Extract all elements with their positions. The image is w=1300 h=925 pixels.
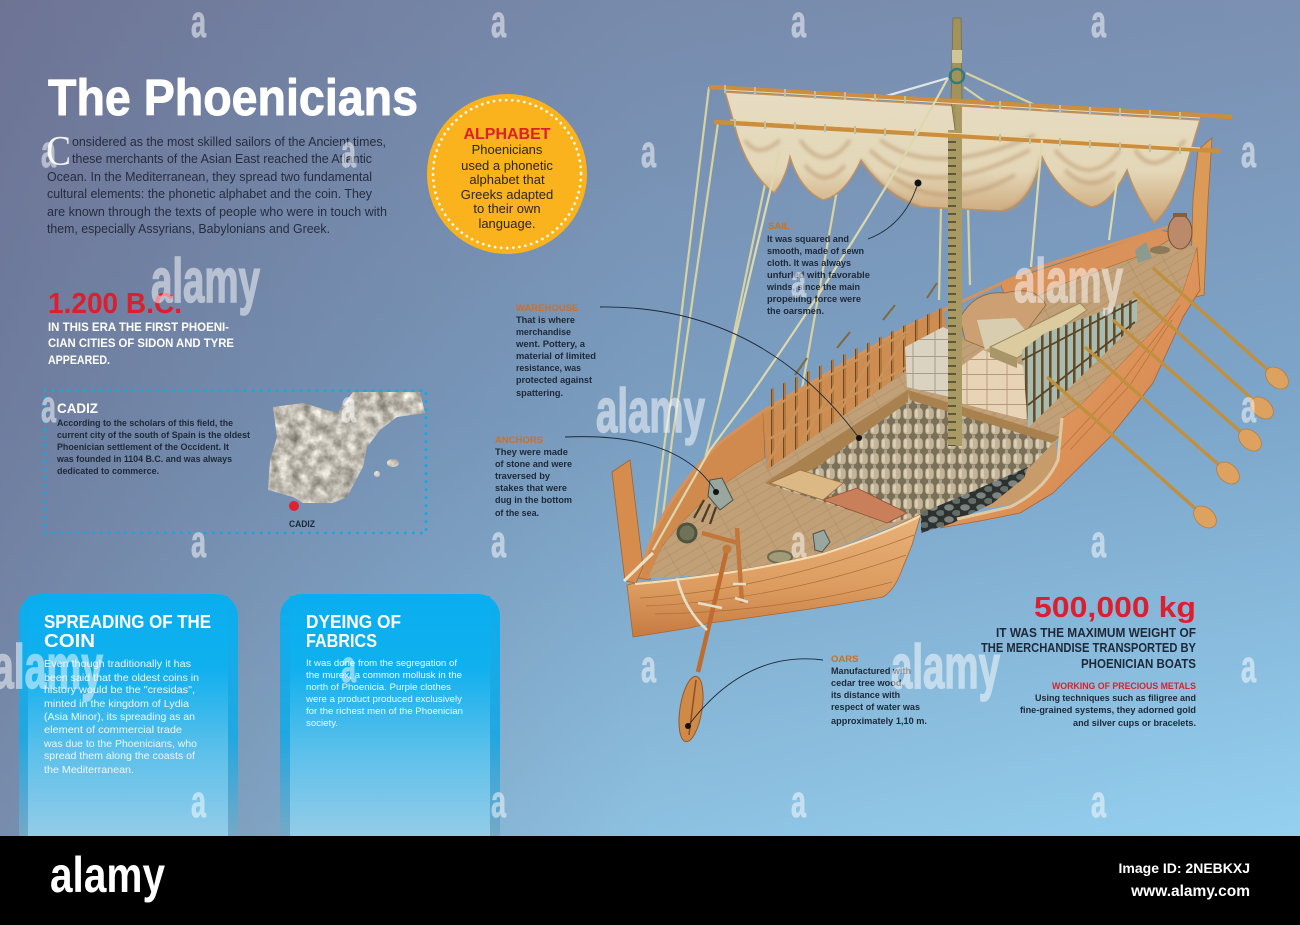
precious metals text: fine-grained systems, they adorned gold [1020, 705, 1196, 716]
Cadiz text: CADIZ [57, 400, 98, 416]
oars label: respect of water was [831, 702, 920, 713]
stock watermarks: a [191, 516, 207, 567]
intro text block: these merchants of the Asian East reached the Atlantic [72, 151, 372, 166]
dyeing body text [305, 658, 463, 729]
coin body text: been said that the oldest coins in [44, 672, 199, 684]
weight fact: 500,000 kg: IT WAS THE MAXIMUM WEIGHT OF [996, 626, 1196, 640]
panel: dyeing of fabrics [280, 594, 500, 854]
stock watermarks: a [41, 381, 57, 432]
mast [948, 18, 964, 446]
stock watermarks: a [341, 381, 357, 432]
coin body text: Even though traditionally it has [44, 658, 191, 670]
stock watermarks: a [1091, 776, 1107, 827]
stock watermarks: alamy [891, 633, 1000, 702]
date fact: 1.200 B.C.: APPEARED. [48, 353, 110, 367]
callout: alphabet circle: alphabet that [469, 172, 545, 187]
cargo bales [905, 291, 1087, 420]
panel: spreading of the coin [19, 594, 238, 854]
stock watermarks: a [491, 516, 507, 567]
coin body text: element of commercial trade [44, 724, 182, 736]
stock watermarks: a [641, 126, 657, 177]
far bulwark at the stern [1000, 230, 1178, 310]
panel: dyeing of fabrics: FABRICS [306, 631, 377, 651]
hull plank lines [1060, 305, 1180, 450]
stock watermarks: a [791, 256, 807, 307]
oars label [831, 654, 927, 727]
stock watermarks: a [1241, 381, 1257, 432]
footer bar: alamy [50, 847, 165, 903]
hull rim at the cut [957, 418, 1062, 519]
coin body text: the Mediterranean. [44, 764, 134, 776]
inner hull tan side [970, 442, 1057, 510]
stock watermarks: alamy [151, 247, 260, 316]
intro text block: C [46, 129, 71, 175]
right fence [1022, 298, 1137, 428]
oars leader line [685, 659, 823, 729]
callout: alphabet circle: Greeks adapted [461, 187, 553, 202]
left fence [763, 283, 950, 470]
sail leader line [868, 180, 922, 239]
intro text block: Ocean. In the Mediterranean, they spread two fundamental [47, 169, 372, 184]
sail label: propelling force were [767, 294, 861, 305]
ship illustration [612, 18, 1293, 743]
anchors label: of stone and were [495, 459, 572, 470]
ropes in front of the sail [653, 78, 1118, 550]
warehouse label: WAREHOUSE [516, 303, 578, 314]
stock watermarks: a [341, 641, 357, 692]
Cadiz text: current city of the south of Spain is the oldest [57, 430, 251, 441]
wooden boards [770, 470, 843, 500]
warehouse label: material of limited [516, 351, 596, 362]
callout: alphabet circle: ALPHABET [463, 126, 551, 143]
stock watermarks: a [1241, 641, 1257, 692]
coin body text: (Asia Minor), its spreading as an [44, 711, 195, 723]
panel: dyeing of fabrics: DYEING OF [306, 612, 401, 632]
weight fact: 500,000 kg [981, 592, 1197, 671]
weight fact: 500,000 kg: 500,000 kg [1034, 592, 1196, 624]
stock watermarks: a [1091, 516, 1107, 567]
Cadiz text: dedicated to commerce. [57, 466, 159, 477]
near hull [624, 514, 921, 637]
Cadiz text: was founded in 1104 B.C. and was always [56, 454, 232, 465]
yards [709, 85, 1232, 154]
sail label: It was squared and [767, 234, 849, 245]
intro text block [46, 129, 387, 236]
sail label: unfurled with favorable [767, 270, 870, 281]
callout: alphabet circle: to their own [473, 201, 541, 216]
anchors label: traversed by [495, 471, 551, 482]
stock watermarks: a [191, 776, 207, 827]
far gunwale [640, 227, 1168, 576]
sail [725, 92, 1200, 223]
anchors label [495, 435, 572, 519]
dyeing body text: the murex, a common mollusk in the [306, 670, 462, 681]
panel: Cadiz [45, 390, 426, 533]
red bricks [823, 488, 907, 523]
intro text block: are known through the texts of people who were in touch with [47, 204, 387, 219]
hold with jars [770, 398, 1058, 523]
callout: alphabet circle: used a phonetic [461, 158, 553, 173]
stock watermarks: a [641, 641, 657, 692]
map of Iberia [268, 392, 425, 530]
dyeing body text: north of Phoenicia. Purple clothes [306, 682, 451, 693]
title: The Phoenicians [48, 69, 418, 126]
panel: spreading of the coin: COIN [44, 631, 95, 651]
dyeing body text: were a product produced exclusively [305, 694, 462, 705]
callout: alphabet circle: Phoenicians [472, 142, 543, 157]
weight fact: 500,000 kg: THE MERCHANDISE TRANSPORTED BY [981, 641, 1197, 655]
oars label: Manufactured with [831, 666, 911, 677]
date fact: 1.200 B.C. [48, 288, 234, 367]
precious metals text: and silver cups or bracelets. [1073, 718, 1196, 729]
coin body text: minted in the kingdom of Lydia [44, 698, 189, 710]
intro text block: them, especially Assyrians, Babylonians and Greek. [47, 221, 330, 236]
oars label: OARS [831, 654, 858, 665]
map of Iberia: CADIZ [289, 519, 315, 530]
stock watermarks: a [491, 776, 507, 827]
weight fact: 500,000 kg: PHOENICIAN BOATS [1081, 657, 1196, 671]
coin body text [43, 658, 199, 776]
hold beams [765, 390, 1060, 487]
dyeing body text: for the richest men of the Phoenician [306, 706, 463, 717]
callout: alphabet circle: language. [478, 216, 536, 231]
stock watermarks: a [791, 776, 807, 827]
anchors label: of the sea. [495, 508, 539, 519]
date fact: 1.200 B.C.: IN THIS ERA THE FIRST PHOENI- [48, 320, 229, 334]
precious metals text [1020, 681, 1196, 729]
deck [648, 238, 1197, 578]
panel: spreading of the coin: SPREADING OF THE [44, 612, 211, 632]
warehouse label: protected against [516, 375, 593, 386]
footer bar: Image ID: 2NEBKXJ [1119, 860, 1250, 876]
anchors label: stakes that were [495, 483, 567, 494]
bow post [612, 460, 643, 583]
sail label: winds, since the main [766, 282, 860, 293]
sail label: smooth, made of sewn [767, 246, 864, 257]
footer bar: www.alamy.com [1130, 883, 1250, 900]
warehouse label [515, 303, 596, 399]
stock watermarks: a [1241, 126, 1257, 177]
sail label: cloth. It was always [767, 258, 851, 269]
warehouse label: That is where [516, 315, 575, 326]
ballast stones [921, 467, 1028, 533]
sail label: the oarsmen. [767, 306, 824, 317]
footer bar [0, 836, 1300, 925]
anchors label: dug in the bottom [495, 495, 572, 506]
stock watermarks: alamy [1014, 247, 1123, 316]
warehouse label: went. Pottery, a [515, 339, 586, 350]
intro text block: cultural elements: the phonetic alphabet and the coin. They [47, 186, 372, 201]
stern post [1190, 138, 1212, 298]
coin body text: was due to the Phoenicians, who [43, 738, 197, 750]
stock watermarks: a [41, 126, 57, 177]
far bulwark at the bow [638, 411, 765, 580]
ropes behind the sail [652, 73, 1095, 545]
oars label: its distance with [831, 690, 900, 701]
oars label: cedar tree wood, [831, 678, 904, 689]
sail label [766, 221, 870, 317]
coin body text: history would be the "cresidas", [44, 684, 195, 696]
Cadiz text: According to the scholars of this field, the [57, 418, 233, 429]
oars label: approximately 1,10 m. [831, 716, 927, 727]
precious metals text: Using techniques such as filigree and [1035, 693, 1196, 704]
intro text block: onsidered as the most skilled sailors of the Ancient times, [72, 134, 386, 149]
coin body text: spread them along the coasts of [44, 750, 195, 762]
oars on the far side [1047, 268, 1293, 532]
Cadiz text [56, 400, 251, 477]
precious metals text: WORKING OF PRECIOUS METALS [1052, 681, 1196, 692]
stock watermarks: a [341, 126, 357, 177]
Cadiz text: Phoenician settlement of the Occident. It [57, 442, 230, 453]
anchors leader line [565, 437, 719, 495]
warehouse label: merchandise [516, 327, 571, 338]
warehouse label: resistance, was [516, 363, 581, 374]
anchors and rope coils on the deck [678, 478, 830, 563]
stern deck fittings and urn [1135, 213, 1192, 263]
dyeing body text: It was done from the segregation of [306, 658, 457, 669]
anchors label: ANCHORS [495, 435, 543, 446]
warehouse leader line [600, 307, 862, 441]
sail label: SAIL [768, 221, 790, 232]
stock watermarks: a [791, 516, 807, 567]
stock watermarks: alamy [596, 377, 705, 446]
steering oar [675, 528, 748, 743]
anchors label: They were made [495, 447, 568, 458]
date fact: 1.200 B.C.: 1.200 B.C. [48, 288, 182, 320]
date fact: 1.200 B.C.: CIAN CITIES OF SIDON AND TYRE [48, 336, 234, 350]
callout: alphabet circle [427, 94, 587, 254]
warehouse label: spattering. [516, 388, 563, 399]
outer hull far end [940, 247, 1200, 528]
dyeing body text: society. [306, 718, 338, 729]
